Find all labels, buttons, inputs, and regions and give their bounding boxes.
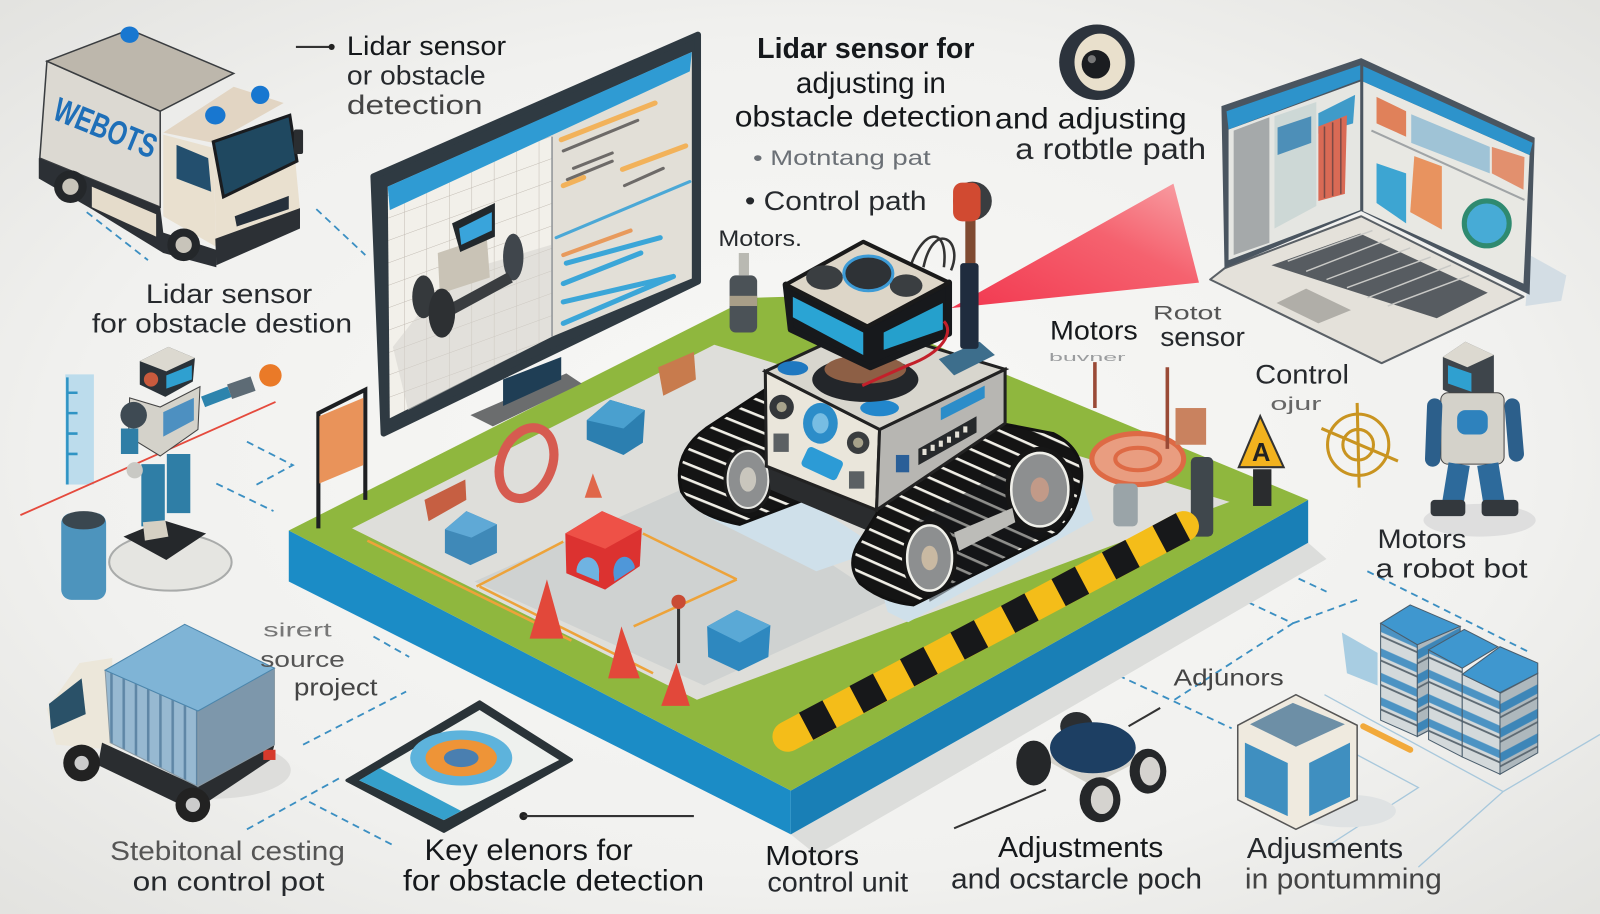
label: stationary testing: [110, 836, 345, 897]
arm: [203, 392, 230, 402]
left track: [679, 390, 804, 524]
label: key elements: for obstacle detection: [403, 865, 704, 898]
motor canister: [730, 253, 757, 333]
cab front: [213, 114, 300, 245]
small rover: [954, 708, 1166, 828]
bullet list: • Motntang pat: [753, 146, 931, 170]
yellow-black barrier: [788, 526, 1184, 737]
cargo box side: [40, 61, 160, 207]
torso: [129, 387, 200, 456]
label: motors right: Motors: [1050, 316, 1138, 346]
scene objects: [424, 352, 1213, 706]
screen title bar: [388, 52, 692, 210]
label: motors control unit: control unit: [767, 867, 909, 898]
red wire: [862, 321, 948, 386]
label: lidar top left: or obstacle: [347, 61, 486, 91]
lidar mast: [953, 182, 992, 349]
cube unit: [1238, 695, 1410, 829]
right track: [853, 423, 1082, 605]
blue cube: [445, 511, 497, 565]
right small robot: [1423, 342, 1536, 537]
underbody: [767, 461, 880, 530]
icon: crosshair target: [1321, 403, 1398, 488]
label: lidar top left: Lidar sensor: [347, 31, 506, 61]
label: lidar left: for obstacle destion: [92, 309, 352, 339]
cargo box top: [47, 30, 234, 111]
head: [140, 347, 195, 397]
label: adjustments programming: [1245, 833, 1442, 895]
label: source project: source: [260, 647, 345, 672]
label: adjustments path: Adjustments: [998, 832, 1163, 864]
truck top left: [39, 27, 303, 267]
label: lidar heading center: adjusting in: [796, 67, 946, 100]
platform left side: [289, 530, 791, 834]
head lower: [786, 283, 949, 367]
tablet: [347, 702, 571, 831]
label: key elements: [403, 812, 704, 898]
shadow under robot: [704, 479, 1094, 622]
label: lidar heading center: a rotbtle path: [1015, 133, 1206, 166]
blue box front: [707, 610, 770, 671]
plinth: [123, 520, 206, 560]
warning sign billboard: [318, 390, 365, 528]
body side right: [877, 369, 1005, 510]
label: motors a robot bot: [1376, 524, 1528, 583]
side window: [177, 145, 211, 192]
label: motors control unit: Motors: [765, 840, 859, 871]
head screens: [793, 297, 943, 355]
laptop right page: [1363, 82, 1530, 284]
cab side: [163, 135, 216, 247]
legs: [1453, 464, 1494, 502]
torso: [1441, 393, 1504, 464]
skirt: [92, 187, 156, 237]
track wheels: [902, 447, 1074, 596]
cab roof: [163, 87, 284, 143]
blue barrel: [61, 511, 106, 600]
legs: [153, 454, 179, 526]
ruler ticks: [67, 377, 78, 485]
laptop screen frame: [1221, 58, 1535, 295]
traffic post: [677, 602, 680, 663]
label: key elements: Key elenors for: [424, 834, 633, 867]
target ring: [1092, 434, 1184, 485]
mirror: [294, 130, 303, 154]
bumper: [215, 208, 300, 265]
label: motors right: buvner: [1049, 352, 1126, 364]
grille: [235, 196, 289, 226]
left track wheel: [723, 446, 772, 513]
laptop charts left: [1234, 95, 1355, 255]
label: lidar top left: [296, 31, 506, 120]
platform right side: [791, 500, 1308, 834]
laptop title bars: [1227, 65, 1360, 130]
right track lower side: [918, 454, 1046, 602]
label: adjunors: Adjunors: [1173, 665, 1284, 690]
label: lidar heading center: Lidar sensor for: [757, 33, 974, 65]
head: [1443, 342, 1494, 400]
grey canisters: [1113, 484, 1138, 526]
container rear: [198, 668, 274, 786]
monitor stand: [470, 357, 582, 426]
label: lidar left: Lidar sensor: [146, 279, 312, 309]
disc base: [109, 534, 232, 591]
server racks: [1342, 605, 1538, 774]
monitor: [373, 35, 698, 434]
small house: [658, 352, 696, 396]
red cube: [565, 511, 642, 590]
link bar: [954, 508, 1015, 551]
bullet list: • Control path: [745, 186, 927, 216]
arms: [1433, 406, 1516, 459]
brick wall: [424, 479, 466, 521]
rack one: [1381, 605, 1460, 737]
wheels: [63, 745, 100, 781]
rover robot: [679, 182, 1082, 605]
rack two: [1429, 629, 1498, 757]
wheels: [54, 170, 87, 203]
screen floor: [393, 245, 552, 410]
label: motors a robot bot: Motors: [1378, 524, 1466, 554]
label: control: ojur: [1270, 393, 1321, 414]
monitor frame: [373, 35, 698, 434]
laptop charts right: [1371, 97, 1524, 246]
pavement: [352, 345, 1230, 700]
keyboard: [1271, 234, 1488, 318]
truck bottom left: [47, 624, 291, 822]
bullet list: [745, 146, 931, 216]
label: robot sensor: sensor: [1160, 322, 1245, 352]
red light: [263, 750, 276, 760]
label: motors near mast: Motors.: [718, 226, 802, 251]
icon: warning sign: [1239, 416, 1284, 506]
label: source project: sirert: [263, 620, 333, 642]
cones: [530, 579, 563, 639]
label: source project: [260, 620, 378, 702]
laptop left page: [1229, 82, 1360, 260]
label: lidar left: [92, 279, 352, 339]
label: motors control unit: [765, 840, 909, 898]
label: robot sensor: Rotot: [1153, 302, 1222, 324]
rack three: [1462, 647, 1538, 774]
label: adjustments programming: in pontumming: [1245, 864, 1442, 895]
connector dashed lines: [87, 209, 1600, 867]
chassis: [98, 743, 274, 811]
turret neck: [812, 357, 918, 402]
platform: [289, 296, 1327, 855]
feet: [143, 520, 168, 541]
screen right panel: [552, 52, 692, 337]
body details: [769, 342, 995, 489]
label: stationary testing: Stebitonal cesting: [110, 836, 345, 866]
icon: camera sensor: [1059, 24, 1135, 100]
post: [1095, 362, 1167, 449]
platform grass top: [289, 296, 1308, 791]
label: motors a robot bot: a robot bot: [1376, 553, 1528, 583]
label: lidar top left: detection: [347, 90, 483, 120]
label: lidar heading center: obstacle detection: [735, 100, 992, 133]
glass shard: [1342, 632, 1378, 686]
body side left: [765, 371, 880, 510]
blue crate back: [587, 400, 645, 455]
head top: [786, 242, 949, 326]
laser line: [20, 402, 276, 515]
mast wire: [910, 237, 954, 270]
windshield: [213, 115, 297, 197]
container top: [105, 624, 274, 711]
label: robot sensor: [1153, 302, 1245, 352]
label: control: [1255, 360, 1349, 414]
laptop base: [1210, 216, 1523, 363]
screen robot: [412, 203, 523, 338]
container side: [105, 670, 198, 786]
label: control: Control: [1255, 360, 1349, 390]
trackpad: [1277, 289, 1351, 323]
label: adjustments path: [951, 832, 1202, 895]
label: source project: project: [294, 675, 378, 702]
WEBOTS label: WEBOTS: [48, 91, 162, 166]
icon: warning sign: A: [1252, 439, 1270, 467]
platform shadow: [791, 543, 1327, 855]
label: adjustments path: and ocstarcle poch: [951, 864, 1202, 895]
left small robot: [20, 347, 282, 591]
screen text lines: [556, 103, 690, 323]
small cone: [585, 473, 602, 498]
laptop: [1210, 58, 1566, 363]
screen divider: [551, 137, 553, 337]
chassis: [39, 158, 216, 267]
ruler pole: [65, 374, 94, 485]
cab: [47, 658, 112, 750]
feet: [1431, 500, 1465, 516]
label: stationary testing: on control pot: [133, 867, 325, 897]
label: lidar heading center: [735, 33, 1206, 166]
head lens ring: [806, 256, 922, 297]
body top: [765, 326, 1005, 429]
label: adjustments programming: Adjusments: [1247, 833, 1403, 865]
laptop shadow: [1526, 255, 1566, 306]
lidar beam: [951, 184, 1199, 308]
label: motors right: [1049, 316, 1138, 364]
screen left panel: [388, 114, 552, 418]
beacons: [120, 27, 269, 124]
label: lidar heading center: and adjusting: [995, 103, 1187, 136]
red ring: [489, 420, 564, 507]
